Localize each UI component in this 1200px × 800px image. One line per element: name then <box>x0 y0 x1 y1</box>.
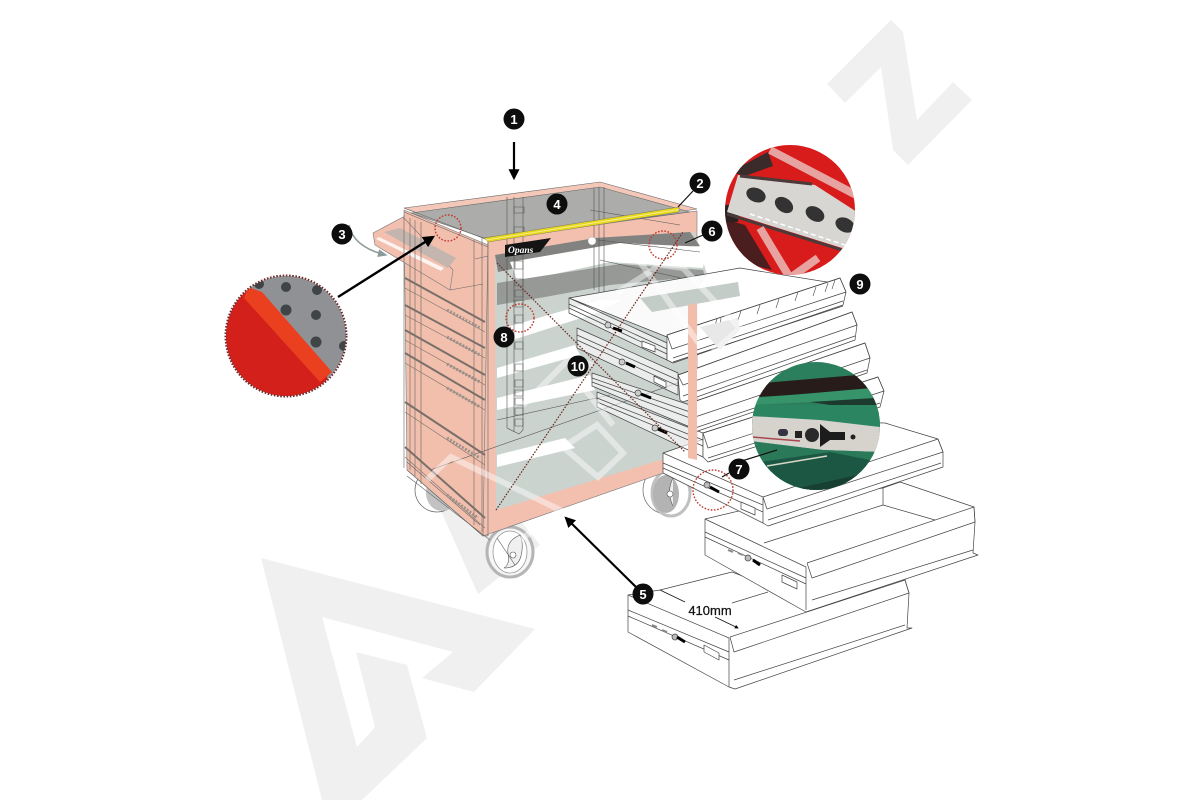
leader: label 6 <box>685 235 703 243</box>
label 9 <box>850 274 870 294</box>
drawer 4 <box>597 377 884 462</box>
interior band seen through top drawer <box>640 282 740 312</box>
cabinet top rim <box>404 182 697 240</box>
label 8: 8 <box>500 330 508 345</box>
drawer 2 <box>577 312 857 402</box>
red dotted detail circles <box>435 215 733 510</box>
label 8 <box>494 326 514 348</box>
watermark: grey shape under cabinet <box>427 480 540 594</box>
number labels <box>332 108 870 604</box>
exploded diagram of tool cabinet <box>224 20 978 800</box>
arrow: label 1 to top <box>513 142 515 178</box>
cabinet right pillar <box>688 303 697 460</box>
drawer 6 <box>705 482 978 612</box>
logo badge: Opans <box>508 246 534 256</box>
side handle <box>373 217 453 290</box>
cabinet top tray <box>411 187 690 238</box>
label 4: 4 <box>553 197 561 212</box>
dimension: 410mm <box>660 590 738 628</box>
label 2 <box>690 172 710 194</box>
wheel: right rear <box>643 466 691 516</box>
arrow: label 5 to cabinet base <box>566 518 636 587</box>
label 9: 9 <box>856 277 864 292</box>
vertical perforated post <box>430 187 700 470</box>
leader: label 2 <box>678 191 693 207</box>
cabinet interior <box>495 232 707 510</box>
yellow strip <box>484 207 679 242</box>
label 1: 1 <box>510 112 518 127</box>
label 5 <box>632 584 654 604</box>
cabinet left face <box>404 210 488 536</box>
dimension: 410mm: 410mm <box>688 603 732 618</box>
label 7: 7 <box>735 462 743 477</box>
drawer 3 <box>592 343 870 432</box>
watermark: light strokes over cabinet <box>427 262 740 540</box>
label 3 <box>332 224 352 244</box>
drawer 7: bottom drawer <box>628 572 912 689</box>
watermark: bottom-left logo shape <box>261 558 535 800</box>
watermark patch on top drawer front <box>700 318 740 350</box>
leader: label 7 <box>722 450 777 477</box>
dotted guide lines <box>496 232 685 510</box>
wheel: left rear <box>415 468 459 512</box>
label 1 <box>504 108 524 130</box>
cabinet front frame <box>483 211 697 536</box>
handle recess <box>384 228 456 268</box>
drawer 5 <box>663 420 943 526</box>
drawer 9: top drawer <box>569 268 846 363</box>
interior dark top band <box>495 232 700 272</box>
drawer rails on left face <box>405 278 485 528</box>
magnifier: green drawer slide <box>750 360 882 492</box>
label 5: 5 <box>639 587 647 602</box>
label 6 <box>702 220 722 242</box>
magnifier: perforated top <box>224 274 348 398</box>
label 7 <box>728 458 750 480</box>
label 10 <box>568 356 588 376</box>
arrow: label 3 curved <box>349 225 386 255</box>
label 3: 3 <box>338 227 346 242</box>
arrow: magnifier to perforated top <box>338 237 433 297</box>
watermark: top-right Z shape <box>827 20 972 165</box>
wheels <box>415 466 691 577</box>
interior white shelves <box>510 243 707 282</box>
wheel: front <box>487 527 533 577</box>
side panel lines <box>404 208 490 540</box>
logo badge <box>505 238 551 257</box>
label 4 <box>546 194 568 214</box>
magnifier: red slotted plate <box>725 145 855 275</box>
cabinet body <box>373 182 707 540</box>
label 10: 10 <box>571 359 585 374</box>
label 2: 2 <box>696 176 704 191</box>
white knob <box>588 237 596 245</box>
label 6: 6 <box>708 224 716 239</box>
